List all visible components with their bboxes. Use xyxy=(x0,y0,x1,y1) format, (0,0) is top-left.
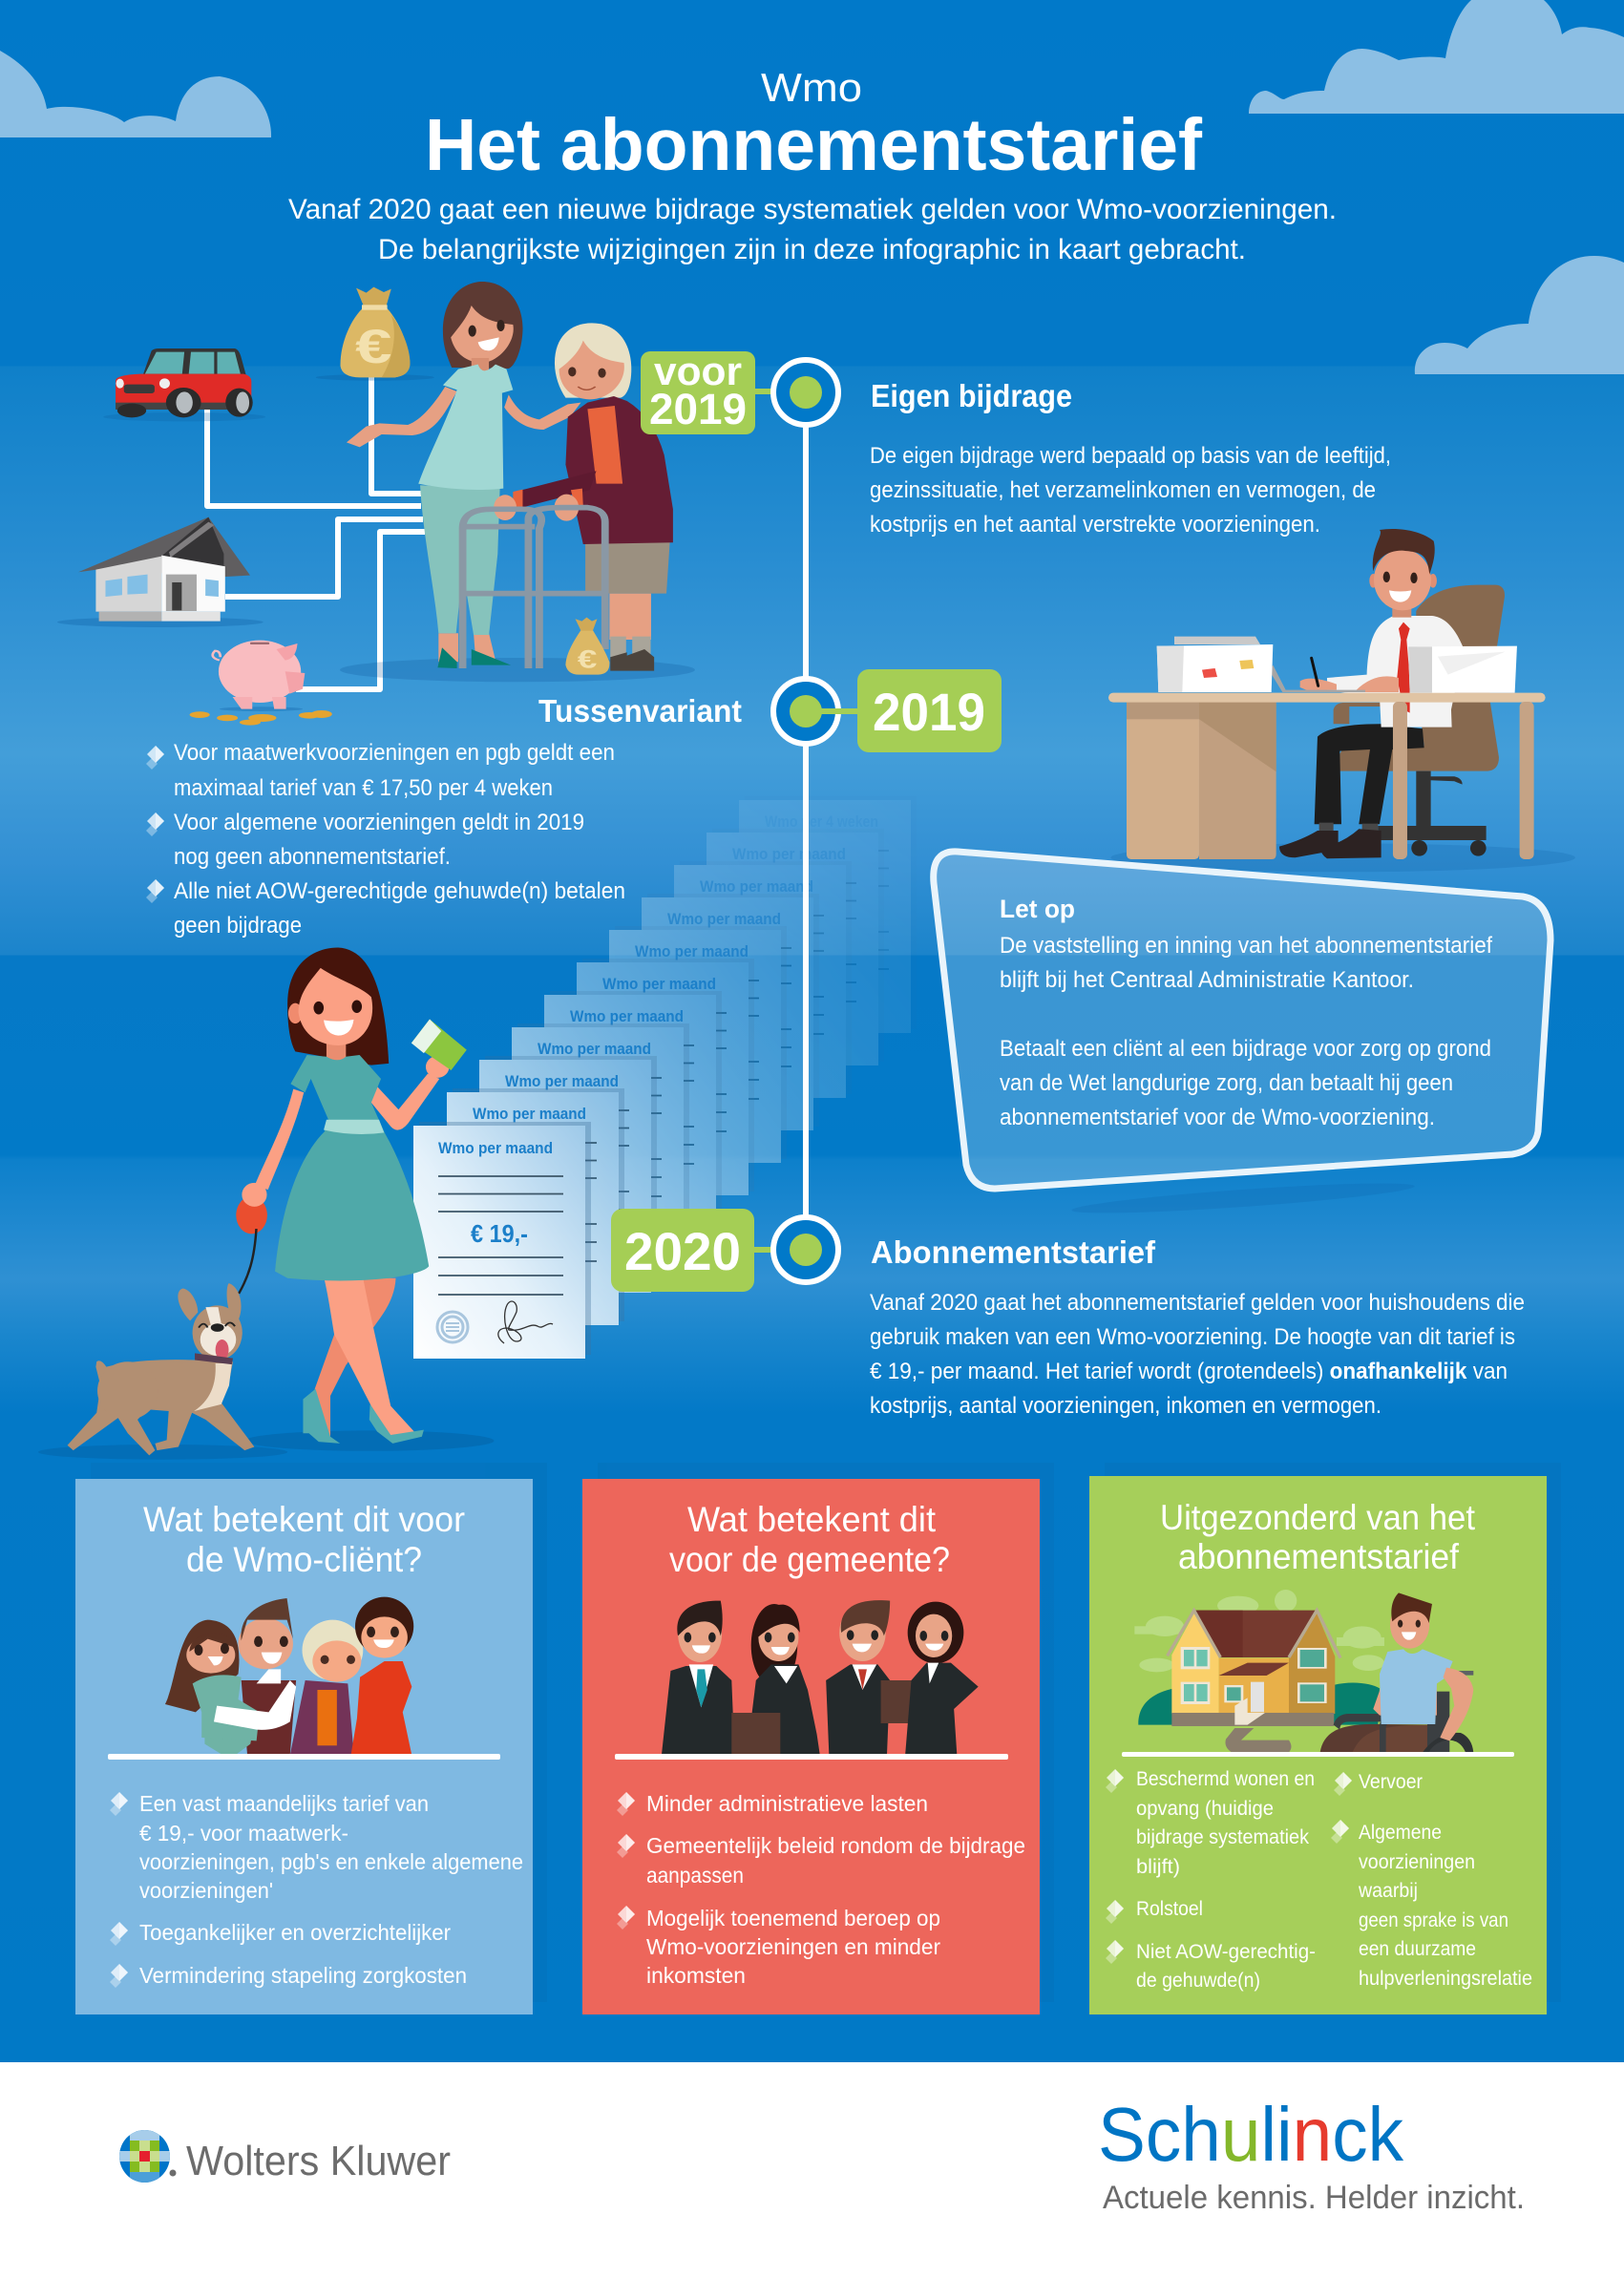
badge: 2019: 2019 xyxy=(873,682,985,742)
heading: Eigen bijdrage xyxy=(871,378,1072,413)
worker xyxy=(1279,529,1464,858)
icon: car xyxy=(103,348,265,421)
bullet list: left column: blijft) xyxy=(1136,1855,1180,1878)
illustration: house and wheelchair user xyxy=(1134,1590,1473,1754)
badge: 2020 xyxy=(611,1209,754,1292)
bullet list: aanpassen xyxy=(646,1863,744,1888)
bullet list: left column: Beschermd wonen en xyxy=(1136,1767,1315,1790)
desk legs xyxy=(1393,702,1534,859)
title xyxy=(288,65,1337,265)
bullet list: geen bijdrage xyxy=(174,913,302,939)
illustration: office worker at desk xyxy=(1108,529,1575,872)
timeline line xyxy=(803,420,809,1222)
subtitle: Wmo: Wmo xyxy=(761,65,862,110)
logo: Wolters Kluwer xyxy=(119,2130,451,2184)
paper stack: monthly invoices: Wmo per 4 weken xyxy=(765,813,878,831)
stamp xyxy=(437,1312,468,1342)
footer xyxy=(0,2062,1624,2278)
paper stack: monthly invoices: Wmo per maand xyxy=(602,976,716,993)
figure: carer xyxy=(347,282,581,668)
bullet list: right column: een duurzame xyxy=(1359,1937,1476,1960)
bullet list: Mogelijk toenemend beroep op xyxy=(646,1906,940,1930)
callout text: Betaalt een cliënt al een bijdrage voor zorg op grond xyxy=(1000,1036,1491,1062)
bullet list: left column xyxy=(1106,1767,1316,1992)
callout: Let op xyxy=(934,852,1550,1219)
bullet list: € 19,- voor maatwerk- xyxy=(139,1821,348,1846)
heading: Abonnementstarief xyxy=(871,1234,1156,1270)
bullet list: right column: Algemene xyxy=(1359,1821,1442,1844)
desk top xyxy=(1108,693,1546,703)
bullet list: right column: geen sprake is van xyxy=(1359,1909,1508,1931)
bullet list: left column: opvang (huidige xyxy=(1136,1797,1274,1820)
panel heading: abonnementstarief xyxy=(1178,1537,1460,1576)
illustration: family xyxy=(165,1597,413,1755)
bullet list: Minder administratieve lasten xyxy=(646,1791,928,1816)
pen xyxy=(1312,658,1318,686)
panel heading: Uitgezonderd van het xyxy=(1160,1498,1476,1537)
paragraph: kostprijs, aantal voorzieningen, inkomen en vermogen. xyxy=(870,1393,1381,1419)
icon: money bag: € xyxy=(355,320,391,373)
bullet list: voorzieningen' xyxy=(139,1878,273,1903)
paper stack: monthly invoices: Wmo per maand xyxy=(438,1140,553,1157)
paper stack: right xyxy=(1408,646,1517,693)
panel heading: Wat betekent dit xyxy=(687,1500,937,1539)
panel heading xyxy=(669,1500,950,1579)
figure: woman xyxy=(254,947,449,1444)
paper stack: monthly invoices: Wmo per maand xyxy=(635,943,749,960)
timeline marker: 2019 xyxy=(773,669,1002,752)
icon: piggy bank xyxy=(213,641,305,711)
bullet list: Alle niet AOW-gerechtigde gehuwde(n) betalen xyxy=(174,878,625,904)
paper stack: monthly invoices xyxy=(413,796,917,1359)
panel heading: de Wmo-cliënt? xyxy=(186,1540,422,1579)
panel heading: Wat betekent dit voor xyxy=(143,1500,465,1539)
panel shadows xyxy=(91,1463,1561,2002)
bullet list xyxy=(146,740,625,939)
leash xyxy=(236,1183,267,1294)
bullet list: Wmo-voorzieningen en minder xyxy=(646,1934,940,1959)
bullet list: right column: voorzieningen xyxy=(1359,1850,1475,1873)
panel heading: voor de gemeente? xyxy=(669,1540,950,1579)
intro text xyxy=(288,194,1337,265)
bullet list: left column: Niet AOW-gerechtig- xyxy=(1136,1940,1316,1963)
signature xyxy=(498,1301,553,1343)
paper stack: monthly invoices: Wmo per maand xyxy=(538,1041,651,1058)
intro text: Vanaf 2020 gaat een nieuwe bijdrage systematiek gelden voor Wmo-voorzieningen. xyxy=(288,194,1337,225)
illustration: assets and carer xyxy=(57,282,695,726)
icon: house xyxy=(57,517,264,627)
paragraph: € 19,- per maand. Het tarief wordt (grotendeels) onafhankelijk van xyxy=(870,1359,1508,1384)
panel: uitgezonderd xyxy=(1089,1476,1547,2014)
bullet list: nog geen abonnementstarief. xyxy=(174,844,451,870)
panel heading xyxy=(143,1500,465,1579)
bullet list: voorzieningen, pgb's en enkele algemene xyxy=(139,1849,523,1874)
paragraph xyxy=(870,443,1391,538)
bullet list: Voor algemene voorzieningen geldt in 2019 xyxy=(174,810,584,835)
bullet list: Een vast maandelijks tarief van xyxy=(139,1791,429,1816)
bullet list: Vermindering stapeling zorgkosten xyxy=(139,1963,467,1988)
badge: 2020: 2020 xyxy=(624,1221,741,1281)
paper stack: monthly invoices: Wmo per maand xyxy=(667,911,781,928)
badge: voor 2019 xyxy=(641,348,755,434)
bullet list: inkomsten xyxy=(646,1963,746,1988)
bullet list xyxy=(110,1791,523,1988)
icon: money bag xyxy=(316,287,434,381)
logo globe xyxy=(119,2130,170,2183)
bullet list xyxy=(617,1791,1025,1988)
timeline marker: 2020 xyxy=(611,1209,838,1292)
bullet list: left column: bijdrage systematiek xyxy=(1136,1825,1309,1848)
connector lines: assets to person xyxy=(207,377,425,689)
desk chair xyxy=(1334,585,1505,856)
timeline marker: voor 2019 xyxy=(641,348,838,434)
paper stack: left xyxy=(1157,637,1273,692)
figure: dog xyxy=(68,1283,254,1455)
paper stack: monthly invoices: Wmo per maand xyxy=(700,878,813,896)
bullet list: maximaal tarief van € 17,50 per 4 weken xyxy=(174,775,553,801)
heading: Tussenvariant xyxy=(538,693,742,728)
logo wordmark: Wolters Kluwer xyxy=(186,2138,451,2184)
callout text xyxy=(1000,933,1492,1130)
panel heading xyxy=(1160,1498,1476,1576)
icon: small money bag xyxy=(565,618,609,675)
bullet list: right column xyxy=(1331,1770,1532,1990)
bullet list: Gemeentelijk beleid rondom de bijdrage xyxy=(646,1833,1025,1858)
illustration: woman with dog xyxy=(38,947,494,1460)
bullet list: Voor maatwerkvoorzieningen en pgb geldt een xyxy=(174,740,615,766)
illustration: civil servants xyxy=(662,1600,979,1755)
bullet list: right column: hulpverleningsrelatie xyxy=(1359,1967,1532,1990)
paper stack: monthly invoices: Wmo per maand xyxy=(473,1106,586,1123)
intro text: De belangrijkste wijzigingen zijn in deze infographic in kaart gebracht. xyxy=(378,234,1246,265)
callout text: abonnementstarief voor de Wmo-voorziening. xyxy=(1000,1105,1435,1130)
paragraph: Vanaf 2020 gaat het abonnementstarief gelden voor huishoudens die xyxy=(870,1290,1525,1316)
icon: banknotes xyxy=(411,1019,467,1070)
panel: Wmo-client xyxy=(75,1479,533,2014)
section: Eigen bijdrage xyxy=(870,378,1391,538)
laptop xyxy=(1270,665,1365,692)
cloud: top right xyxy=(1249,0,1624,114)
paper stack: monthly invoices: Wmo per maand xyxy=(505,1073,619,1090)
paragraph: gebruik maken van een Wmo-voorziening. De hoogte van dit tarief is xyxy=(870,1324,1515,1350)
figure: elderly woman xyxy=(494,323,673,671)
desk drawers xyxy=(1127,702,1276,859)
badge: 2019 xyxy=(857,669,1002,752)
logo wordmark: Schulinck xyxy=(1098,2092,1404,2177)
paper stack: monthly invoices: Wmo per maand xyxy=(732,846,846,863)
paragraph: De eigen bijdrage werd bepaald op basis van de leeftijd, xyxy=(870,443,1391,469)
callout text: blijft bij het Centraal Administratie Kantoor. xyxy=(1000,967,1414,993)
tagline: Actuele kennis. Helder inzicht. xyxy=(1103,2180,1525,2216)
logo: Schulinck xyxy=(1098,2092,1525,2216)
cloud: right xyxy=(1415,256,1624,374)
amount: € 19,- xyxy=(471,1219,528,1248)
icon: coins xyxy=(190,710,332,726)
panel: gemeente xyxy=(582,1479,1040,2014)
callout text: van de Wet langdurige zorg, dan betaalt hij geen xyxy=(1000,1070,1453,1096)
section: Abonnementstarief xyxy=(870,1234,1525,1419)
bullet list: right column: waarbij xyxy=(1358,1879,1418,1902)
paragraph: kostprijs en het aantal verstrekte voorzieningen. xyxy=(870,512,1320,538)
badge: voor 2019: voor xyxy=(654,348,742,393)
bullet list: right column: Vervoer xyxy=(1359,1770,1423,1793)
badge: voor 2019: 2019 xyxy=(649,385,747,433)
shadow under figures xyxy=(340,658,695,682)
bullet list: Toegankelijker en overzichtelijker xyxy=(139,1920,451,1945)
bullet list: left column: Rolstoel xyxy=(1136,1897,1203,1920)
section: Tussenvariant xyxy=(146,693,742,939)
callout heading: Let op xyxy=(1000,895,1075,923)
paper stack: monthly invoices: Wmo per maand xyxy=(570,1008,684,1025)
heading: Het abonnementstarief: Het abonnementstarief xyxy=(425,104,1202,186)
bullet list: left column: de gehuwde(n) xyxy=(1136,1969,1260,1992)
cloud: top left xyxy=(0,51,271,137)
paragraph: gezinssituatie, het verzamelinkomen en vermogen, de xyxy=(870,477,1376,503)
walker frame xyxy=(463,508,605,668)
callout text: De vaststelling en inning van het abonnementstarief xyxy=(1000,933,1492,959)
paragraph xyxy=(870,1290,1525,1419)
icon: small money bag: € xyxy=(578,644,597,673)
